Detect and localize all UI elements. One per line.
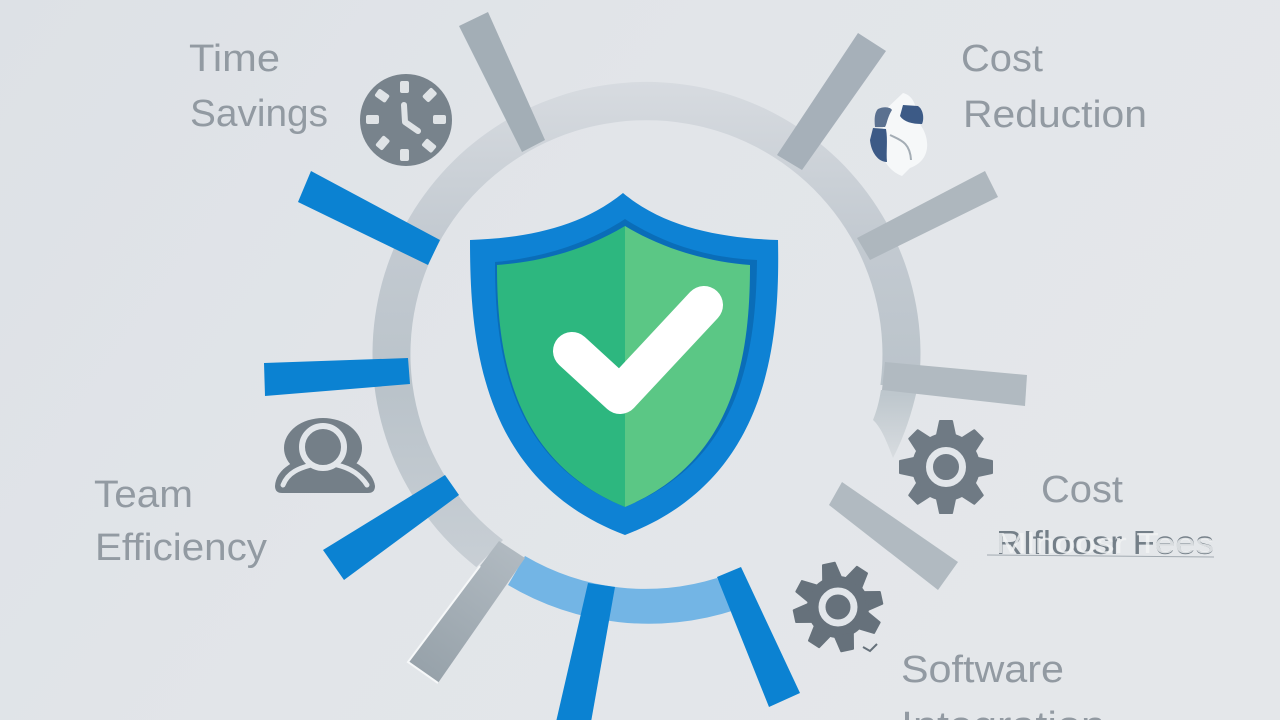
ray: right upper gray <box>857 171 998 260</box>
ray: top right gray <box>777 33 886 170</box>
label: Cost Reduction <box>961 38 1147 136</box>
check mark <box>572 305 704 395</box>
icon: gear right <box>900 421 992 513</box>
label: Software Integration <box>901 649 1105 720</box>
label: Time Savings: Savings <box>190 93 328 135</box>
label: Time Savings: Time <box>189 38 280 80</box>
label: Cost Fees <box>987 469 1214 561</box>
ray: lower right gray <box>829 482 958 590</box>
garbled overlapped line: RIfloosr Fees <box>996 524 1214 561</box>
label: Team Efficiency <box>94 474 267 569</box>
ray: top gray <box>459 12 545 152</box>
ray: bottom blue <box>556 583 615 720</box>
label: Team Efficiency: Team <box>94 474 193 516</box>
label: Team Efficiency: Efficiency <box>95 527 267 569</box>
label: Software Integration: Software <box>901 649 1064 691</box>
label: Time Savings <box>189 38 328 135</box>
shield outer blue <box>470 193 778 535</box>
ray: bottom left gray <box>408 541 525 683</box>
shield left half <box>497 226 625 507</box>
shield right half <box>625 226 750 507</box>
icon: dollar bag <box>870 93 927 176</box>
icon: team <box>275 418 375 493</box>
label: Cost Fees: Cost <box>1041 469 1123 511</box>
icon: clock <box>360 74 452 166</box>
shield dark inner band <box>495 219 757 507</box>
ray: right gray <box>882 362 1027 406</box>
icon: gear bottom <box>793 562 883 652</box>
central ring <box>372 82 920 624</box>
ray: left blue <box>264 358 410 396</box>
garbled overlapped line: Mlnoosr Tees <box>996 528 1214 560</box>
ray: left lower blue <box>323 475 459 580</box>
ray: upper left blue <box>298 171 440 265</box>
label: Cost Reduction: Reduction <box>963 94 1147 136</box>
shield <box>470 193 778 535</box>
label: Cost Reduction: Cost <box>961 38 1043 80</box>
rays <box>264 12 1027 720</box>
ray: bottom right blue <box>717 567 800 707</box>
